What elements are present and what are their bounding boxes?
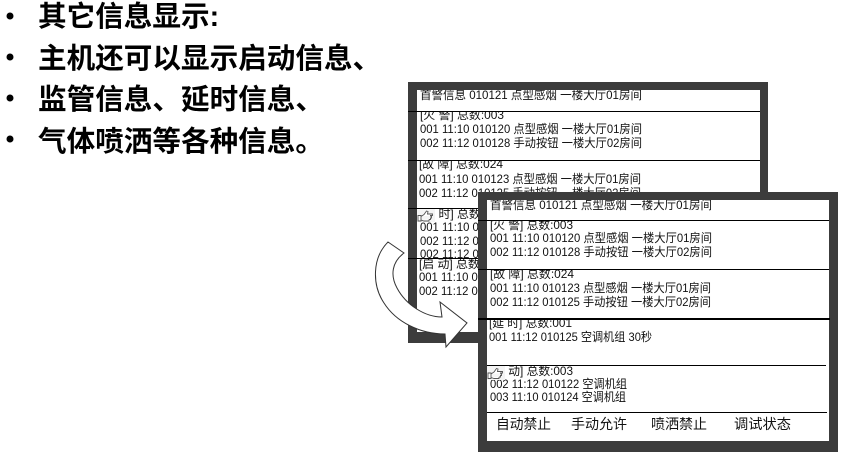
back row: first alarm: 首警信息 010121 点型感烟 一楼大厅01房间: [420, 87, 642, 102]
front section: delay: [489, 320, 652, 342]
soft key menu: [496, 416, 791, 432]
front section: fire alarms: [490, 221, 712, 258]
back section: start: 001 11:10 010122 空调机组 一楼大厅01房间: [419, 269, 641, 284]
back section: delay: 002 11:12 010127 空调机组 一楼大厅02房间: [420, 246, 642, 261]
back section: delay: 002 11:12 010126 空调机组 一楼大厅02房间: [420, 233, 642, 248]
bullet item 4: 气体喷洒等各种信息。: [38, 126, 324, 158]
front section: fire alarms: 001 11:10 010120 点型感烟 一楼大厅01房间: [490, 230, 712, 245]
front section: start: [启 动] 总数:003: [490, 363, 573, 378]
front row: first alarm: 首警信息 010121 点型感烟 一楼大厅01房间: [490, 197, 712, 212]
back section: delay: 001 11:10 010125 空调机组 一楼大厅01房间: [420, 219, 642, 234]
back section: delay: [420, 209, 478, 258]
back section: fire alarms: [420, 112, 642, 148]
front section: faults: 001 11:10 010123 点型感烟 一楼大厅01房间: [490, 280, 711, 295]
back section: start: 002 11:12 010124 空调机组 一楼大厅02房间: [419, 283, 641, 298]
front section: faults: 002 11:12 010125 手动按钮 一楼大厅02房间: [490, 294, 711, 309]
icon: pointing hand (back): [417, 209, 435, 222]
back section: fire alarms: 001 11:10 010120 点型感烟 一楼大厅01房间: [420, 121, 642, 136]
bullet list: other information display: [6, 1, 381, 158]
soft key menu: 手动允许: [571, 416, 627, 432]
arrow: curved from back screen to front screen: [375, 242, 467, 347]
soft key menu: 调试状态: [734, 416, 791, 432]
soft key menu: 喷洒禁止: [651, 416, 707, 432]
back section: delay: [延 时] 总数:001: [420, 206, 504, 221]
front section: faults: [故 障] 总数:024: [490, 266, 574, 281]
front section: start: 003 11:10 010124 空调机组: [490, 390, 626, 404]
back section: start: [419, 259, 478, 295]
back section: faults: 001 11:10 010123 点型感烟 一楼大厅01房间: [419, 171, 641, 186]
back section: start: [启 动] 总数:003: [419, 256, 503, 271]
back section: fire alarms: [火 警] 总数:003: [420, 107, 504, 122]
front section: fire alarms: [火 警] 总数:003: [490, 217, 573, 232]
front section: fire alarms: 002 11:12 010128 手动按钮 一楼大厅02房间: [490, 244, 712, 259]
back section: fire alarms: 002 11:12 010128 手动按钮 一楼大厅02房间: [420, 135, 642, 150]
bullet item 2: 主机还可以显示启动信息、: [38, 43, 381, 75]
panel: back screen: [408, 82, 768, 343]
front section: start: [490, 366, 627, 402]
front section: start: 002 11:12 010122 空调机组: [490, 377, 627, 391]
panel: front screen: [478, 192, 838, 452]
front section: delay: 001 11:12 010125 空调机组 30秒: [489, 330, 652, 344]
bullet item 1: 其它信息显示:: [38, 1, 219, 33]
back section: faults: 002 11:12 010125 手动按钮 一楼大厅02房间: [419, 185, 641, 200]
front section: faults: [490, 270, 710, 308]
icon: pointing hand (front): [487, 366, 505, 380]
back section: faults: [故 障] 总数:024: [419, 156, 503, 171]
back section: faults: [419, 161, 640, 197]
bullet item 3: 监管信息、延时信息、: [38, 84, 324, 116]
front section: delay: [延 时] 总数:001: [489, 315, 572, 330]
soft key menu: 自动禁止: [496, 416, 551, 432]
